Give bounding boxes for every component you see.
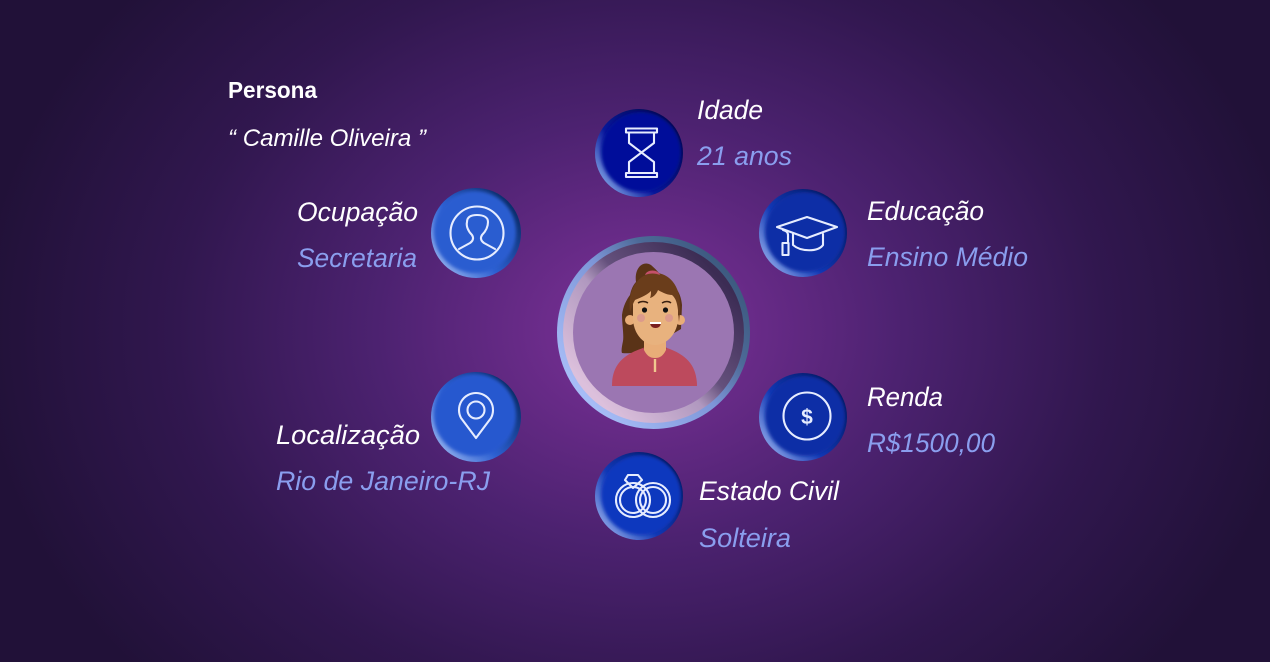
heading: persona [228,77,427,152]
item: idade [595,95,792,197]
fringe [630,273,680,322]
label: ocupação: Ocupação [297,197,418,227]
item: renda [759,373,995,461]
label: renda: R$1500,00 [867,428,995,458]
ponytail and hair back [622,264,682,353]
neck [644,332,666,358]
label: idade: 21 anos [696,141,792,171]
label: localização [276,420,490,496]
label: educação [867,196,1028,272]
label: renda: Renda [867,382,943,412]
label: estado civil: Estado Civil [699,476,840,506]
label: idade: Idade [697,95,763,125]
ears [625,315,635,325]
item: localização [276,372,521,496]
item: ocupação [297,188,521,278]
icon: dollar coin [759,373,847,461]
label: estado civil: Solteira [699,523,791,553]
label: ocupação [297,197,418,273]
icon: graduation cap [759,189,847,277]
label: localização: Rio de Janeiro-RJ [276,466,490,496]
label: localização: Localização [276,420,420,450]
heading: persona: Persona [228,77,317,103]
label: estado civil [699,476,840,553]
icon: user [431,188,521,278]
item: estado civil [595,452,840,553]
avatar: woman [612,264,697,386]
mouth [650,322,661,328]
label: educação: Ensino Médio [867,242,1028,272]
label: ocupação: Secretaria [297,243,417,273]
label: educação: Educação [867,196,984,226]
icon: map pin [431,372,521,462]
face [633,284,678,345]
eyes [642,307,647,313]
shirt [612,348,697,386]
icon: hourglass [595,109,683,197]
scrunchie [645,270,660,275]
item: educação [759,189,1028,277]
central portrait [557,236,750,429]
label: renda [867,382,995,458]
icon: rings [595,452,683,540]
portrait ring [557,236,750,429]
icon: dollar coin: $ [801,406,813,429]
label: idade [696,95,792,171]
cheeks [637,314,645,322]
heading: persona: “ Camille Oliveira ” [228,125,427,152]
